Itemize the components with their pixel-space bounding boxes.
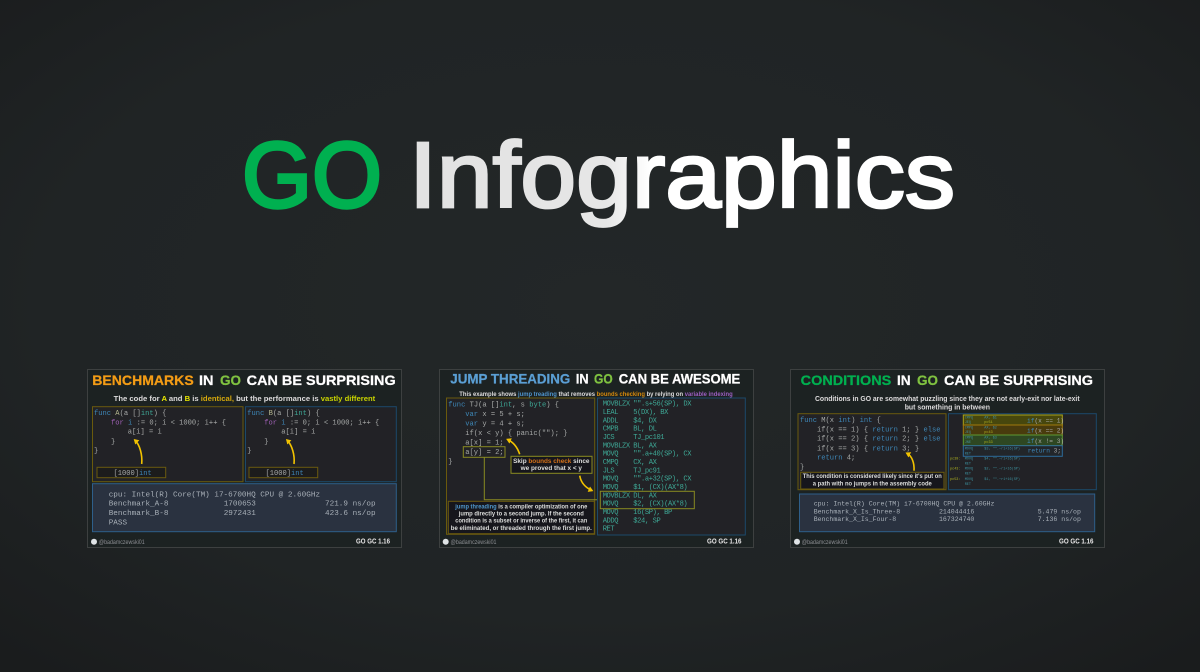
code panel: function A: [92, 407, 243, 482]
arrow: skip check: [508, 440, 520, 454]
footer: GO GC 1.16: [1059, 536, 1094, 546]
highlight: array store instructions: [600, 491, 694, 509]
fallthrough blocks: MOVQ: [965, 478, 973, 482]
assembly listing: MOVQ: [603, 509, 618, 517]
footer: [91, 536, 390, 546]
heading: jump threading in go can be awesome: CAN BE AWESOME: [619, 372, 740, 386]
code panel: function TJ: var x = 5 + s;: [465, 411, 525, 419]
code panel: function A: }: [111, 438, 115, 446]
assembly listing: RET: [603, 526, 614, 534]
code panel: function TJ: if(x < y) { panic(""); }: [465, 430, 567, 438]
branch: x == 2: [963, 425, 1064, 435]
assembly listing: "".a+40(SP), CX: [633, 451, 692, 459]
code panel: function A: a[i] = i: [128, 429, 162, 437]
heading: conditions in go can be surprising: CONDITIONS: [801, 373, 891, 388]
footer: [794, 536, 1094, 546]
benchmark results: 5.479 ns/op: [1038, 508, 1081, 515]
code panel: function M: func M(x int) int {: [800, 417, 881, 425]
heading: benchmarks in go can be surprising: BENCHMARKS: [92, 373, 194, 388]
fallthrough blocks: pc53:: [950, 478, 961, 482]
code panel: function B: for i := 0; i < 1000; i++ {: [264, 419, 379, 427]
heading: jump threading in go can be awesome: IN: [576, 372, 589, 386]
code panel: function M: [798, 414, 946, 490]
fallthrough blocks: $2, "".~r1+16(SP): [984, 467, 1020, 472]
subtitle: Conditions in GO are somewhat puzzling since they are not early-exit nor late-exit: [815, 394, 1080, 403]
subtitle: [815, 394, 1080, 412]
highlight: a[y] line: [463, 447, 505, 457]
benchmark results: 2972431: [224, 510, 256, 518]
heading: jump threading in go can be awesome: [450, 372, 740, 386]
assembly listing: $1, (CX)(AX*8): [633, 484, 687, 492]
assembly listing: JCS: [603, 434, 614, 442]
assembly listing: "".s+56(SP), DX: [633, 401, 692, 409]
benchmark results: cpu: Intel(R) Core(TM) i7-6700HQ CPU @ 2.60GHz: [109, 491, 320, 499]
panel: conditions: [790, 370, 1104, 548]
arrow: to assembly: [580, 476, 592, 490]
assembly listing: MOVBLZX: [603, 492, 631, 500]
code panel: function M: if(x == 1) { return 1; } else: [817, 426, 940, 434]
subtitle: This example shows jump treading that removes bounds checking by relying on variable indexing: [459, 391, 733, 398]
heading: benchmarks in go can be surprising: IN: [199, 373, 214, 388]
assembly listing: LEAL: [603, 409, 618, 417]
code panel: function B: func B(a []int) {: [247, 410, 320, 418]
callout: jump threading definition: jump directly to a second jump. If the second: [458, 510, 584, 517]
assembly listing: CX, AX: [633, 459, 658, 467]
callout: jump threading definition: be eliminated, or threaded through the first jump.: [451, 525, 592, 532]
label: array type A: [97, 467, 166, 478]
fallthrough blocks: RET: [965, 462, 971, 466]
branch: x != 3: pc33: [984, 441, 993, 445]
code panel: function TJ: [446, 398, 600, 534]
subtitle: but something in between: [905, 403, 990, 412]
benchmark results: Benchmark_X_Is_Three-8: [814, 508, 900, 515]
assembly listing: $4, DX: [633, 417, 658, 425]
assembly listing: MOVBLZX: [603, 401, 631, 409]
assembly listing: JLS: [603, 467, 614, 475]
assembly diagram: [948, 414, 1096, 490]
fallthrough blocks: RET: [965, 483, 971, 487]
code panel: function M: if(x == 3) { return 3; }: [817, 445, 919, 453]
heading: benchmarks in go can be surprising: [92, 373, 396, 388]
branch: x == 1: JEQ: [965, 421, 971, 425]
arrow: array to indexing B: [287, 440, 294, 464]
branch: x != 3: AX, $3: [984, 436, 997, 440]
code panel: function B: }: [264, 438, 269, 446]
callout: jump threading definition: condition is a subset or inverse of the first, it can: [455, 518, 587, 525]
branch: return 3: $3, "".~r1+16(SP): [984, 446, 1020, 451]
code panel: function TJ: var y = 4 + s;: [465, 420, 525, 428]
code panel: function M: }: [800, 464, 804, 472]
footer: GO GC 1.16: [707, 536, 742, 546]
benchmark results: 1700653: [224, 501, 256, 509]
assembly listing: BL, DL: [633, 426, 657, 434]
branch: x != 3: CMPQ: [965, 436, 973, 440]
code panel: function TJ: }: [448, 458, 453, 466]
panel: benchmarks: [88, 370, 402, 548]
heading: conditions in go can be surprising: [801, 373, 1093, 388]
heading: jump threading in go can be awesome: JUMP THREADING: [450, 372, 570, 386]
callout: skip bounds check: Skip bounds check since: [513, 458, 590, 465]
benchmark results: Benchmark_X_Is_Four-8: [814, 516, 896, 523]
benchmark results: 167324740: [939, 516, 974, 523]
title: GO Infographics: Infographics: [409, 123, 955, 227]
benchmark results: 214044416: [939, 508, 974, 515]
heading: jump threading in go can be awesome: GO: [594, 372, 613, 386]
fallthrough blocks: pc39:: [950, 458, 961, 462]
panel: jump threading: [440, 370, 754, 548]
heading: benchmarks in go can be surprising: GO: [220, 373, 241, 388]
code panel: function B: }: [247, 448, 252, 456]
branch: x == 1: CMPQ: [965, 416, 973, 420]
label: array type A: [1000]int: [114, 470, 152, 478]
heading: conditions in go can be surprising: IN: [897, 373, 911, 388]
subtitle: The code for A and B is identical, but the performance is vastly different: [114, 394, 376, 403]
fallthrough blocks: $4, "".~r1+16(SP): [984, 457, 1020, 462]
branch: x == 2: if(x == 2): [1027, 427, 1064, 434]
assembly listing: $24, SP: [633, 517, 660, 525]
heading: conditions in go can be surprising: GO: [917, 373, 938, 388]
branch: return 3: return 3;: [1028, 448, 1061, 454]
benchmark results: 7.136 ns/op: [1038, 516, 1081, 523]
code panel: function A: func A(a []int) {: [94, 410, 166, 418]
code panel: function M: if(x == 2) { return 2; } else: [817, 436, 940, 444]
callout: jump threading definition: jump threading is a compiler optimization of one: [454, 503, 588, 510]
label: array type B: [1000]int: [266, 470, 304, 478]
footer: @badamczewski01: [99, 540, 145, 546]
fallthrough blocks: $1, "".~r1+16(SP): [984, 477, 1020, 482]
benchmark results: [800, 494, 1095, 532]
branch: x == 1: pc51: [984, 421, 993, 425]
assembly listing: TJ_pc91: [633, 467, 660, 475]
fallthrough blocks: MOVQ: [965, 468, 973, 472]
label: array type B: [249, 467, 318, 478]
assembly listing: "".a+32(SP), CX: [633, 476, 692, 484]
callout: likely condition note: [801, 472, 944, 489]
benchmark results: Benchmark_A-8: [109, 501, 169, 509]
branch: x != 3: [963, 435, 1064, 446]
code panel: function TJ: func TJ(a []int, s byte) {: [448, 402, 559, 410]
callout: likely condition note: a path with no jumps in the assembly code: [813, 480, 932, 487]
arrow: likely path: [907, 453, 914, 471]
branch: x != 3: if(x != 3): [1027, 438, 1064, 445]
footer: GO GC 1.16: [356, 536, 390, 546]
code panel: function B: [246, 407, 396, 482]
assembly listing: CMPQ: [603, 459, 618, 467]
assembly listing: ADDQ: [603, 517, 618, 525]
benchmark results: PASS: [109, 519, 127, 527]
code panel: function M: return 4;: [817, 455, 855, 463]
assembly listing: MOVQ: [603, 484, 618, 492]
fallthrough blocks: [950, 457, 1020, 487]
arrow: array to indexing A: [135, 440, 142, 464]
assembly listing: MOVBLZX: [603, 442, 631, 450]
callout: skip bounds check: [511, 456, 592, 473]
code panel: function A: }: [94, 448, 98, 456]
heading: benchmarks in go can be surprising: CAN BE SURPRISING: [247, 373, 396, 388]
callout: likely condition note: This condition is considered likely since it's put on: [803, 473, 942, 480]
branch: x == 2: CMPQ: [965, 426, 973, 430]
title: GO Infographics: GO: [242, 123, 382, 227]
branch: x == 1: [963, 415, 1064, 425]
fallthrough blocks: RET: [965, 472, 971, 476]
callout: skip bounds check: we proved that x < y: [520, 465, 582, 472]
fallthrough blocks: pc43:: [950, 468, 961, 472]
assembly listing: DL, AX: [633, 492, 658, 500]
benchmark results: [92, 484, 396, 532]
assembly listing: MOVQ: [603, 501, 618, 509]
branch: x == 2: JEQ: [965, 431, 971, 435]
footer: [443, 536, 742, 546]
assembly listing: MOVQ: [603, 451, 618, 459]
branch: x == 1: AX, $1: [984, 415, 997, 420]
assembly listing: 16(SP), BP: [633, 509, 672, 517]
branch: return 3: RET: [965, 452, 971, 456]
benchmark results: 423.6 ns/op: [325, 510, 376, 518]
benchmark results: cpu: Intel(R) Core(TM) i7-6700HQ CPU @ 2.60GHz: [814, 500, 994, 507]
fallthrough blocks: MOVQ: [965, 458, 973, 462]
branch: x == 2: pc43: [984, 431, 993, 435]
code panel: function TJ: a[y] = 2;: [465, 449, 504, 457]
branch: return 3: MOVQ: [965, 447, 973, 451]
branch: return 3: [963, 446, 1062, 456]
assembly listing: BL, AX: [633, 442, 658, 450]
heading: conditions in go can be surprising: CAN BE SURPRISING: [944, 373, 1093, 388]
callout: jump threading definition: [448, 501, 594, 534]
branch: x != 3: JNE: [965, 441, 971, 445]
code panel: function B: a[i] = i: [281, 429, 315, 437]
assembly listing: TJ_pc101: [633, 434, 664, 442]
assembly listing: ADDL: [603, 417, 618, 425]
assembly listing: [580, 398, 745, 535]
assembly listing: $2, (CX)(AX*8): [633, 501, 687, 509]
assembly listing: CMPB: [603, 426, 618, 434]
connector: a[y] to assembly: [484, 457, 600, 500]
branch: x == 2: AX, $2: [984, 425, 997, 430]
footer: @badamczewski01: [450, 540, 497, 546]
benchmark results: Benchmark_B-8: [109, 510, 169, 518]
code panel: function A: for i := 0; i < 1000; i++ {: [111, 419, 226, 427]
benchmark results: 721.9 ns/op: [325, 501, 376, 509]
branch: x == 1: if(x == 1): [1027, 417, 1064, 424]
assembly listing: 5(DX), BX: [633, 409, 669, 417]
footer: @badamczewski01: [802, 540, 848, 546]
code panel: function TJ: a[x] = 1;: [465, 439, 504, 447]
assembly listing: MOVQ: [603, 476, 618, 484]
